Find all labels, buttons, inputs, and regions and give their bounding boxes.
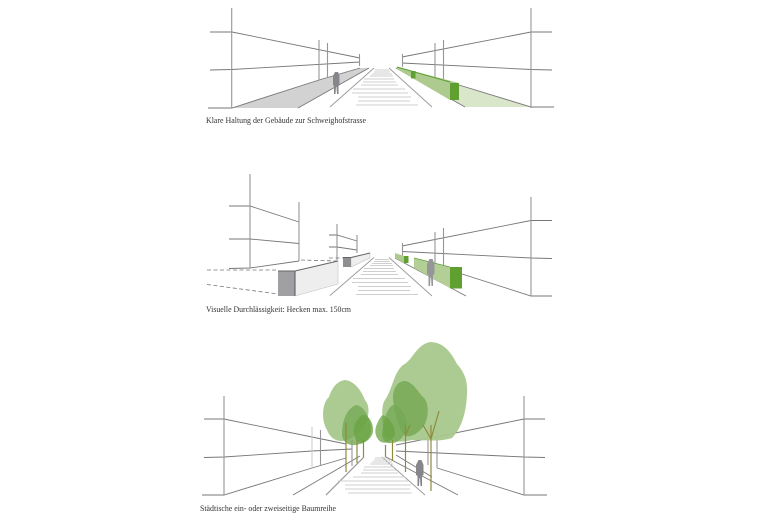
right building verticals bbox=[428, 396, 524, 495]
panel: tree row bbox=[200, 342, 547, 513]
caption: Klare Haltung der Gebäude zur Schweighofstrasse bbox=[206, 115, 366, 125]
green hedge near bbox=[414, 258, 462, 288]
road bbox=[330, 258, 432, 296]
dashed sight lines bbox=[207, 258, 343, 294]
tree: medium left bbox=[342, 405, 371, 445]
right building verticals bbox=[402, 197, 531, 296]
person bbox=[427, 259, 434, 286]
left building lines bbox=[208, 32, 369, 108]
tree: large right bbox=[382, 342, 467, 442]
green hedge bbox=[397, 67, 459, 100]
left building lines bbox=[202, 419, 364, 495]
right building lines bbox=[396, 32, 554, 107]
panel: visual permeability bbox=[206, 174, 552, 314]
caption: Städtische ein- oder zweiseitige Baumreihe bbox=[200, 503, 336, 513]
grey wall far bbox=[343, 253, 370, 267]
right light green ground bbox=[450, 85, 531, 107]
left building lines bbox=[229, 206, 357, 268]
caption: Visuelle Durchlässigkeit: Hecken max. 150cm bbox=[206, 304, 351, 314]
tree: large left bbox=[323, 380, 369, 441]
right building lines bbox=[395, 220, 552, 296]
left building verticals bbox=[232, 8, 360, 108]
road bbox=[326, 457, 425, 495]
person bbox=[333, 72, 340, 94]
tree: dark right bbox=[393, 381, 428, 436]
green hedge far bbox=[395, 253, 408, 263]
right trees bbox=[375, 342, 467, 443]
right building lines bbox=[386, 419, 547, 495]
tree trunks bbox=[346, 411, 439, 491]
tree: small right bbox=[375, 415, 395, 443]
tree: small left bbox=[354, 415, 373, 443]
left trees bbox=[323, 380, 373, 445]
left ground plane bbox=[232, 68, 369, 108]
tree: medium right bbox=[382, 405, 407, 443]
left building verticals bbox=[250, 174, 357, 268]
road bbox=[330, 68, 432, 107]
person bbox=[416, 460, 424, 486]
grey wall near bbox=[278, 261, 338, 296]
panel: building alignment bbox=[206, 8, 554, 125]
left building verticals bbox=[224, 396, 352, 495]
right building verticals bbox=[402, 8, 531, 108]
